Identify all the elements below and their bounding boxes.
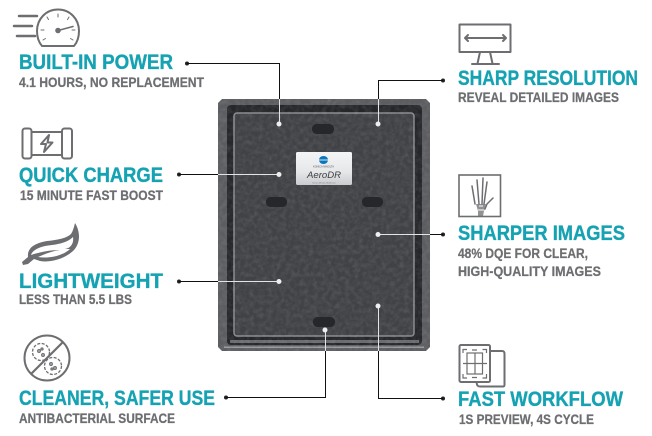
- heading: built-in power: BUILT-IN POWER: [19, 51, 173, 74]
- connector: built-in power: [185, 62, 282, 126]
- subtext: sharper images: HIGH-QUALITY IMAGES: [458, 264, 601, 279]
- icon: feather: [22, 223, 79, 265]
- heading: fast workflow: FAST WORKFLOW: [458, 388, 623, 411]
- product label: KONICA MINOLTA: [313, 166, 334, 168]
- subtext: fast workflow: 1S PREVIEW, 4S CYCLE: [459, 412, 594, 427]
- icon: battery charge: [22, 128, 72, 158]
- subtext: sharper images: [458, 246, 601, 279]
- icon: no germs: [24, 336, 70, 380]
- icon: x-ray hand: [459, 175, 500, 216]
- subtext: built-in power: 4.1 HOURS, NO REPLACEMENT: [19, 75, 205, 90]
- detector panel: [218, 99, 430, 351]
- product label: AeroDR: [306, 170, 342, 180]
- connector: quick charge: [177, 172, 282, 177]
- connector: fast workflow: [376, 304, 445, 400]
- connector: sharp resolution: [376, 78, 445, 126]
- subtext: quick charge: 15 MINUTE FAST BOOST: [20, 188, 164, 203]
- subtext: lightweight: LESS THAN 5.5 LBS: [19, 292, 132, 307]
- subtext: sharp resolution: REVEAL DETAILED IMAGES: [458, 90, 619, 105]
- subtext: cleaner, safer use: ANTIBACTERIAL SURFACE: [19, 411, 175, 426]
- heading: quick charge: QUICK CHARGE: [19, 164, 163, 187]
- icon: monitor: [460, 24, 510, 64]
- icon: image sheets: [460, 345, 504, 386]
- subtext: sharper images: 48% DQE FOR CLEAR,: [458, 246, 588, 261]
- connector: lightweight: [177, 279, 282, 284]
- heading: sharper images: SHARPER IMAGES: [458, 222, 625, 245]
- product label: [296, 152, 352, 185]
- heading: lightweight: LIGHTWEIGHT: [19, 270, 163, 293]
- heading: cleaner, safer use: CLEANER, SAFER USE: [19, 387, 215, 410]
- connector: cleaner, safer use: [224, 328, 328, 400]
- handle slots: [266, 124, 383, 327]
- product label: Konica Minolta Healthcare: [312, 182, 337, 184]
- icon: speedometer: [14, 10, 79, 46]
- connector: sharper images: [376, 232, 445, 237]
